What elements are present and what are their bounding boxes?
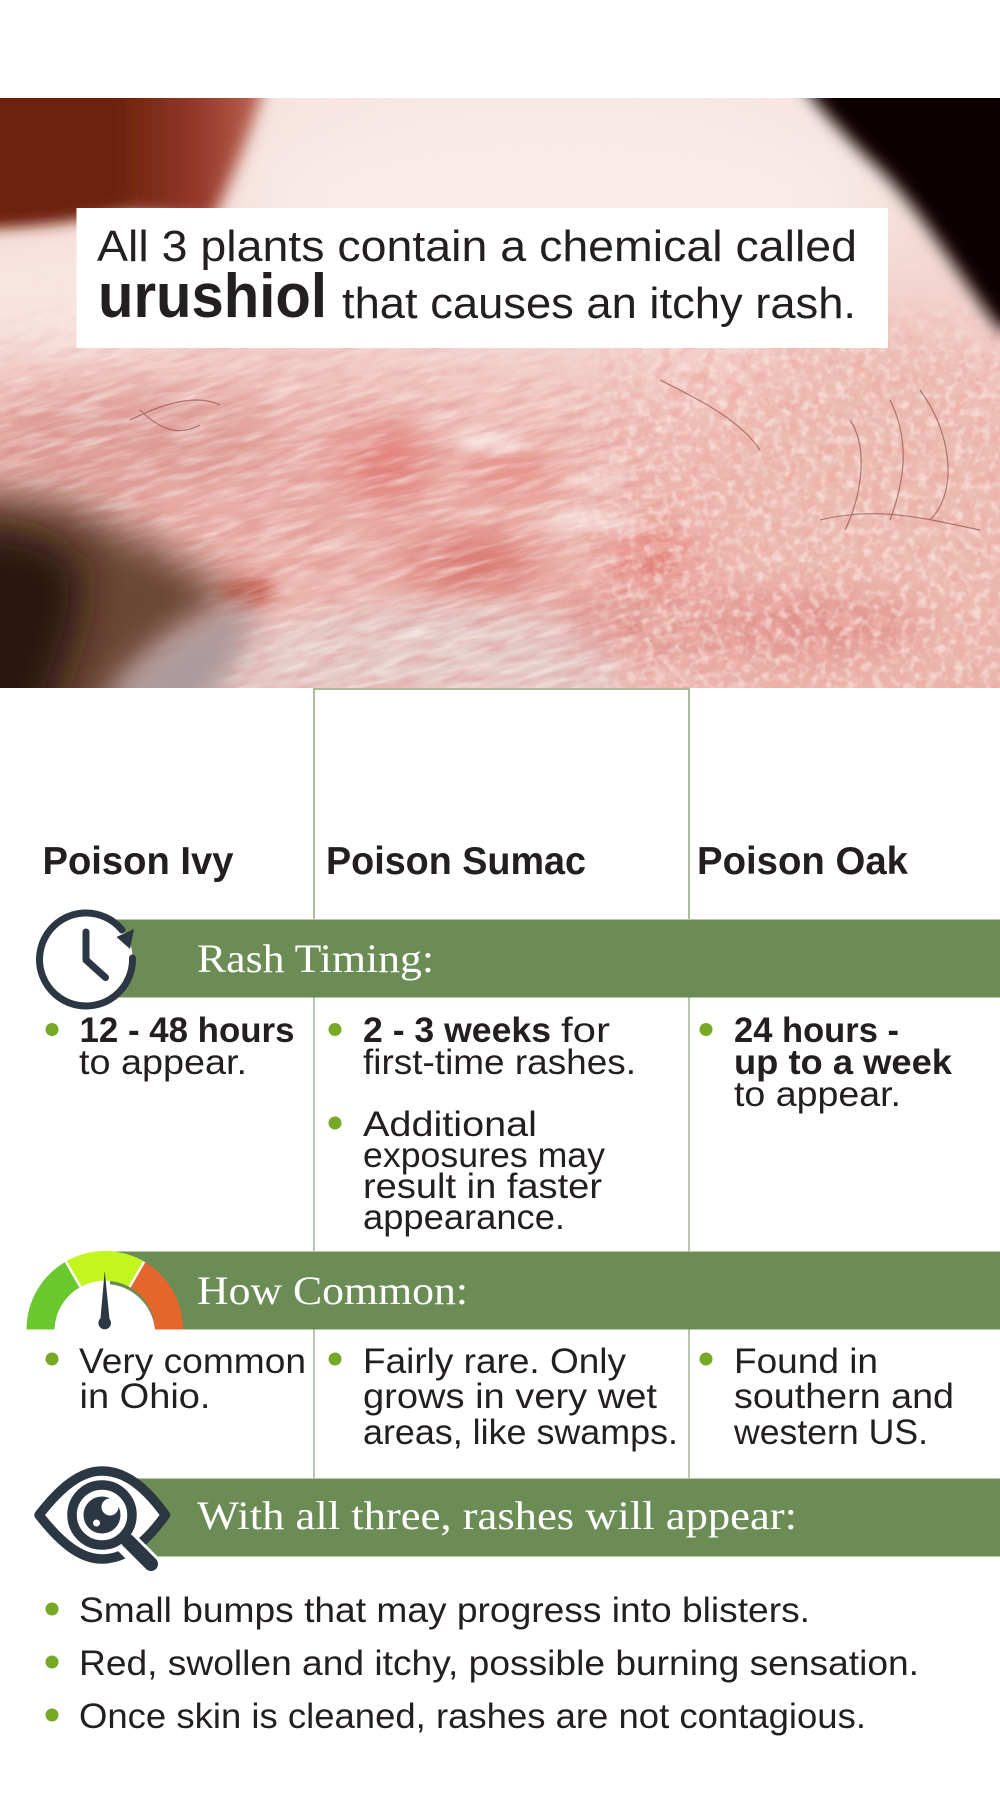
pale wrinkled skin, bottom (180, 604, 640, 700)
dark red top-left (0, 98, 274, 234)
icon: clock (38, 911, 134, 1006)
callout line 1: All 3 plants contain a chemical called (97, 222, 857, 271)
heading: Poison Oak: Poison Oak (697, 840, 908, 883)
banner: How Common: How Common: (197, 1268, 468, 1313)
list: Sumac commonness: areas, like swamps. (363, 1413, 678, 1452)
banner: With all three: With all three, rashes will appear: (197, 1493, 797, 1538)
list: Oak timing: 24 hours - (734, 1011, 899, 1050)
callout line 2 (98, 262, 856, 331)
list: Oak timing (700, 1011, 953, 1114)
heading: Poison Ivy: Poison Ivy (42, 840, 234, 883)
black top-right (796, 98, 1000, 342)
dark bottom-left (0, 490, 240, 730)
hairs (130, 380, 980, 530)
list: Ivy commonness: in Ohio. (80, 1377, 210, 1416)
speckled texture, right (560, 300, 1000, 688)
list: symptoms: Red, swollen and itchy, possible burning sensation. (79, 1644, 919, 1683)
list: Sumac commonness (328, 1342, 678, 1452)
list: Sumac timing: exposures may (363, 1136, 606, 1175)
heading: Poison Sumac: Poison Sumac (326, 840, 586, 883)
banner: How Common (110, 1252, 1000, 1330)
callout line 2: that causes an itchy rash. (342, 279, 856, 328)
list: Oak timing: up to a week (734, 1043, 953, 1082)
list: Ivy timing: 12 - 48 hours (80, 1011, 294, 1050)
photo: skin rash close-up (0, 98, 1000, 688)
list: Sumac timing: appearance. (363, 1198, 565, 1237)
banner: Rash Timing (110, 920, 1000, 998)
banner: Rash Timing: Rash Timing: (197, 936, 434, 981)
list: Sumac commonness: grows in very wet (363, 1377, 657, 1416)
list: Ivy commonness (46, 1342, 306, 1416)
icon: gauge (26, 1251, 183, 1330)
list: Oak commonness: southern and (734, 1377, 954, 1416)
callout: urushiol statement (76, 208, 888, 348)
list: Sumac timing: result in faster (363, 1167, 602, 1206)
list: Sumac timing: first-time rashes. (363, 1043, 636, 1082)
column dividers (314, 689, 689, 1478)
list: Sumac commonness: Fairly rare. Only (363, 1342, 627, 1381)
callout line 2: urushiol (98, 262, 327, 331)
list: Sumac timing: Additional (363, 1105, 537, 1144)
list: Oak commonness: western US. (733, 1413, 928, 1452)
list: Sumac timing (328, 1011, 636, 1237)
list: Ivy timing: to appear. (79, 1043, 247, 1082)
red patches (340, 427, 430, 503)
list: Oak timing: to appear. (734, 1075, 901, 1114)
list: Oak commonness: Found in (734, 1342, 878, 1381)
list: Sumac timing: for (561, 1011, 610, 1050)
list: Ivy commonness: Very common (79, 1342, 306, 1381)
list: symptoms: Once skin is cleaned, rashes are not contagious. (79, 1697, 866, 1736)
banner: With all three (135, 1478, 1000, 1556)
list: symptoms (46, 1591, 919, 1736)
list: symptoms: Small bumps that may progress into blisters. (79, 1591, 810, 1630)
list: Ivy timing (46, 1011, 294, 1082)
diagonal wrinkle texture, left (0, 334, 754, 688)
list: Oak commonness (700, 1342, 954, 1452)
icon: eye with magnifier (39, 1471, 166, 1568)
list: Sumac timing: 2 - 3 weeks (363, 1011, 551, 1050)
